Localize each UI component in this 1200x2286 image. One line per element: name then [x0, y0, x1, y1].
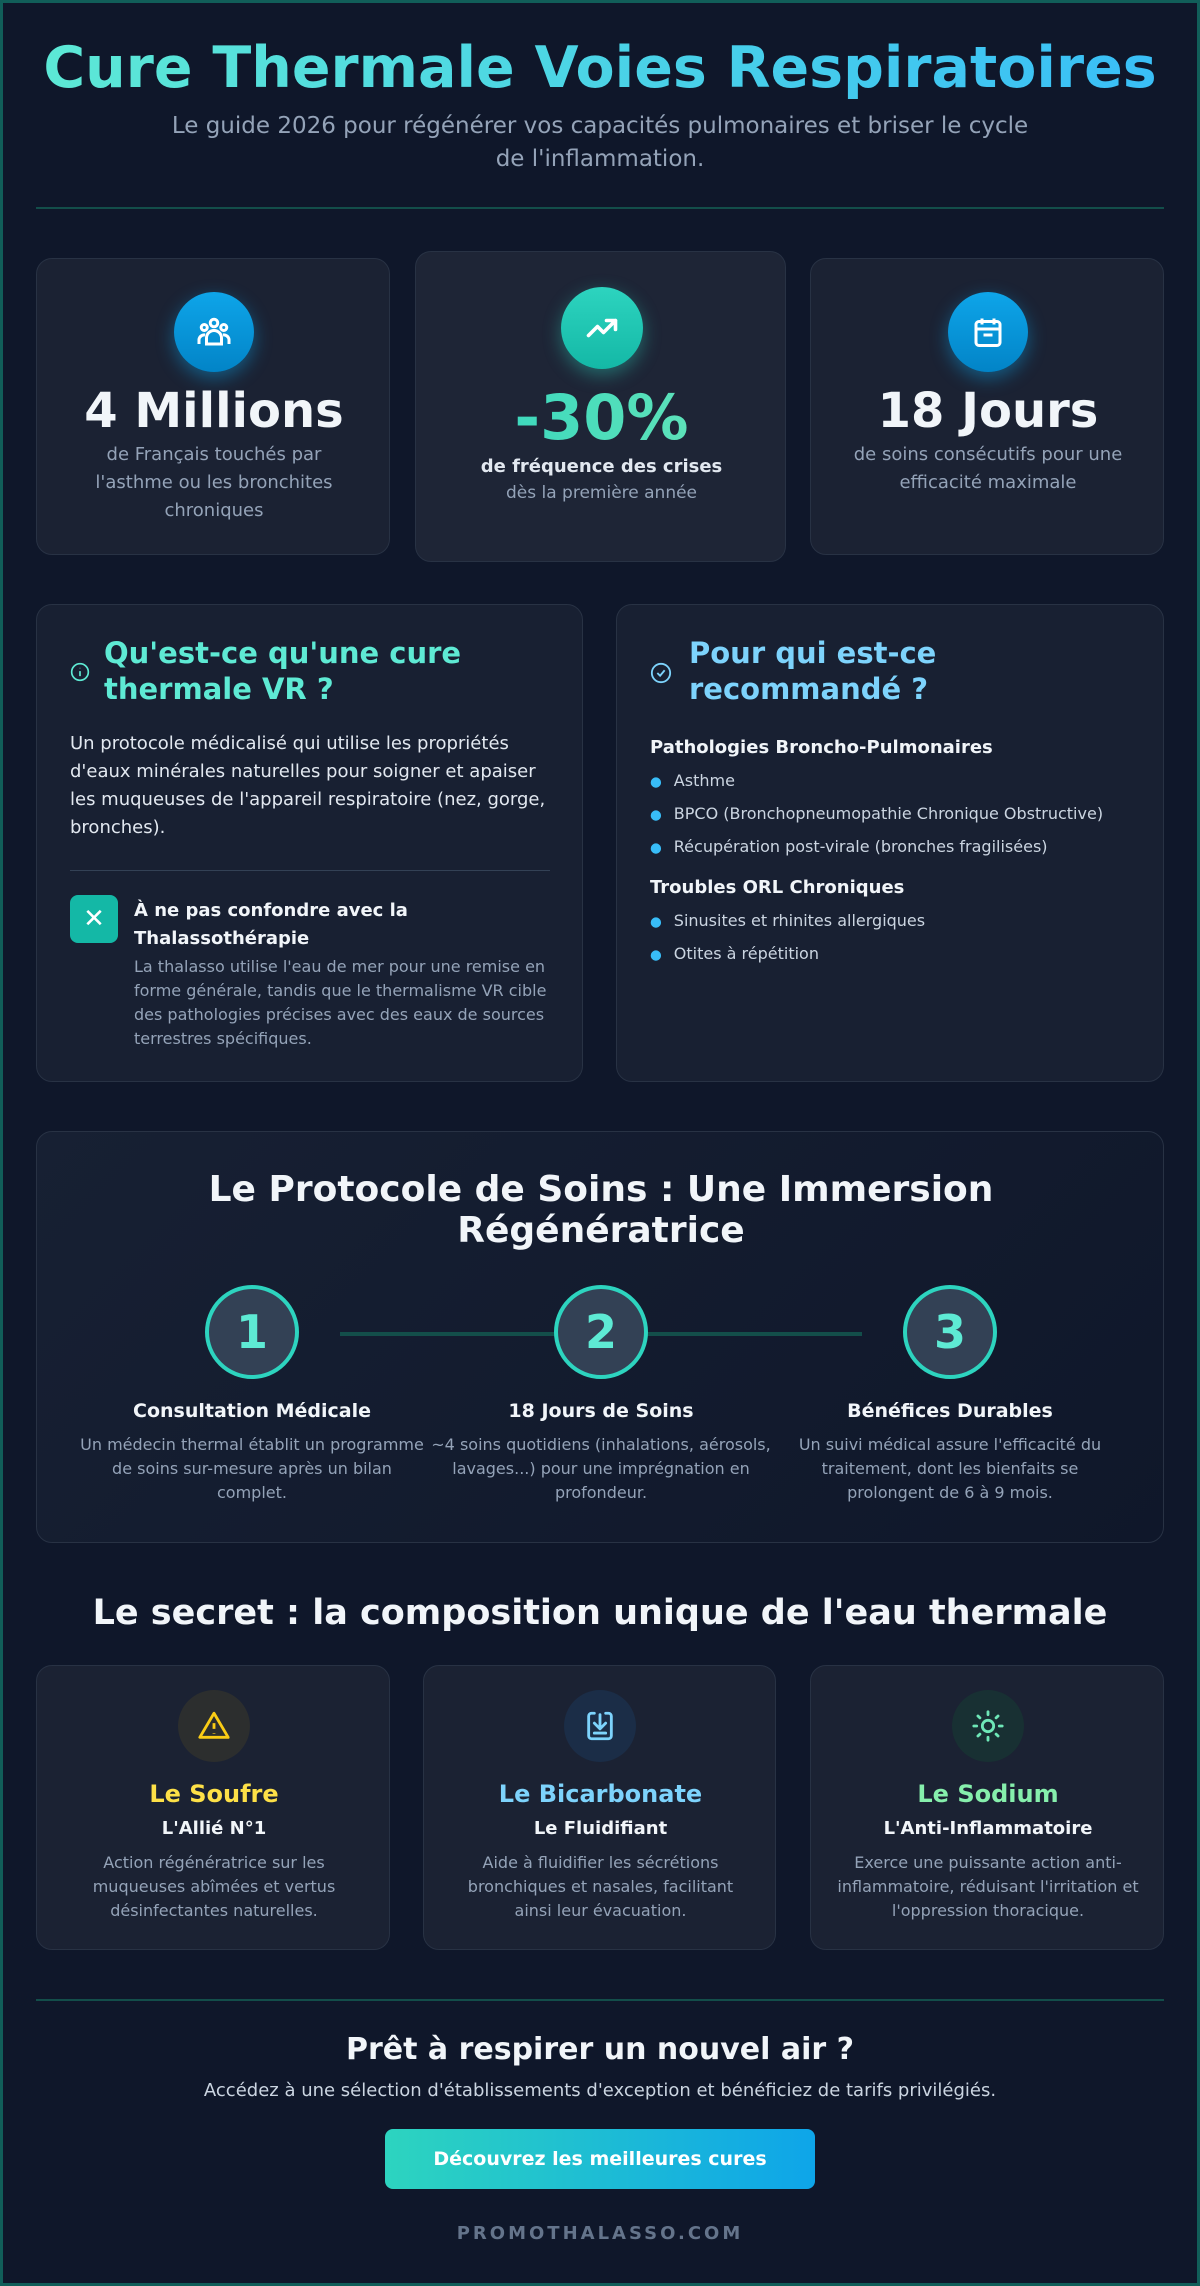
stat description: de fréquence des crises [481, 456, 722, 477]
step 2: 18 Jours de Soins [508, 1400, 694, 1422]
icon: x: ✕ [83, 904, 105, 934]
icon: sun [952, 1690, 1024, 1762]
callout: not thalasso: La thalasso utilise l'eau de mer pour une remise en forme générale, tandis que le thermalisme VR cible des pathologies précises avec des eaux de sources terrestres spécifiques. [134, 957, 546, 1048]
callout: not thalasso [70, 895, 546, 1048]
stat number [416, 378, 787, 458]
icon: x [70, 895, 118, 943]
card: sodium [810, 1665, 1164, 1950]
card: sodium: Exerce une puissante action anti-inflammatoire, réduisant l'irritation et l'oppression thoracique. [837, 1853, 1139, 1920]
step 2: 2 [585, 1305, 617, 1359]
icon: warning [178, 1690, 250, 1762]
card: sodium: L'Anti-Inflammatoire [884, 1818, 1092, 1839]
stat description: de Français touchés par l'asthme ou les bronchites chroniques [95, 444, 333, 521]
step 3 [799, 1285, 1101, 1502]
stat number: 18 Jours [878, 383, 1098, 439]
CTA text: Accédez à une sélection d'établissements d'exception et bénéficiez de tarifs privilégiés. [204, 2080, 996, 2101]
panel: protocole [36, 1131, 1164, 1543]
stat card: -30% [415, 251, 786, 562]
heading: Qu'est-ce qu'une cure thermale VR ? [104, 636, 461, 706]
text block: Un protocole médicalisé qui utilise les propriétés d'eaux minérales naturelles pour soigner et apaiser les muqueuses de l'appareil respiratoire (nez, gorge, bronches). [70, 733, 545, 838]
icon: calendar [948, 292, 1028, 372]
list: ORL: ● Otites à répétition [650, 944, 819, 963]
step 1: Un médecin thermal établit un programme de soins sur-mesure après un bilan complet. [80, 1435, 424, 1502]
step 2: ~4 soins quotidiens (inhalations, aérosols, lavages...) pour une imprégnation en profondeur. [431, 1435, 771, 1502]
card: soufre: Le Soufre [149, 1780, 279, 1808]
footer: PROMOTHALASSO.COM [457, 2223, 743, 2244]
step 2 [431, 1285, 771, 1502]
list: broncho: Pathologies Broncho-Pulmonaires [650, 737, 993, 758]
stat description: de soins consécutifs pour une efficacité maximale [854, 444, 1122, 493]
list: broncho: ● Récupération post-virale (bronches fragilisées) [650, 837, 1048, 856]
card: soufre: L'Allié N°1 [162, 1818, 266, 1839]
stat number: 4 Millions [84, 383, 344, 439]
icon: people [174, 292, 254, 372]
stat card: 4 Millions [36, 258, 390, 555]
card: bicarbonate [423, 1665, 776, 1950]
step 1: 1 [236, 1305, 268, 1359]
CTA button: Découvrez les meilleures cures [433, 2148, 767, 2170]
list: ORL: Troubles ORL Chroniques [650, 877, 904, 898]
list: broncho: ● BPCO (Bronchopneumopathie Chronique Obstructive) [650, 804, 1103, 823]
heading: Pour qui est-ce recommandé ? [689, 636, 936, 706]
list: ORL: ● Sinusites et rhinites allergiques [650, 911, 925, 930]
subtitle: Le guide 2026 pour régénérer vos capacités pulmonaires et briser le cycle de l'inflammation. [172, 113, 1028, 172]
title: Cure Thermale Voies Respiratoires [43, 35, 1157, 101]
card: bicarbonate: Le Bicarbonate [499, 1780, 702, 1808]
icon: check [650, 662, 672, 684]
card: soufre [36, 1665, 390, 1950]
list: broncho: ● Asthme [650, 771, 735, 790]
panel: pour qui [616, 604, 1164, 1082]
list: broncho [650, 737, 1103, 856]
step 3: Un suivi médical assure l'efficacité du traitement, dont les bienfaits se prolongent de 6 à 9 mois. [799, 1435, 1101, 1502]
stat card: -30%: dès la première année [506, 483, 697, 503]
icon: info [70, 662, 90, 682]
card: soufre: Action régénératrice sur les muqueuses abîmées et vertus désinfectantes naturelles. [93, 1853, 335, 1920]
CTA button [385, 2129, 815, 2189]
icon: download [564, 1690, 636, 1762]
step 1 [80, 1285, 424, 1502]
step 3: Bénéfices Durables [847, 1400, 1053, 1422]
card: bicarbonate: Aide à fluidifier les sécrétions bronchiques et nasales, facilitant ainsi leur évacuation. [468, 1853, 733, 1920]
panel: qu'est-ce [36, 604, 583, 1082]
heading: le secret: Le secret : la composition unique de l'eau thermale [93, 1593, 1107, 1633]
CTA heading: Prêt à respirer un nouvel air ? [346, 2032, 854, 2067]
icon: trend [561, 287, 643, 369]
stat card: 18 Jours [810, 258, 1164, 555]
card: sodium: Le Sodium [917, 1780, 1059, 1808]
step 3: 3 [934, 1305, 966, 1359]
heading: Le Protocole de Soins : Une Immersion Régénératrice [209, 1169, 993, 1251]
stat number: -30% [514, 381, 689, 454]
step 1: Consultation Médicale [133, 1400, 371, 1422]
list: ORL [650, 877, 925, 963]
card: bicarbonate: Le Fluidifiant [534, 1818, 667, 1839]
callout: not thalasso: À ne pas confondre avec la Thalassothérapie [134, 900, 408, 949]
